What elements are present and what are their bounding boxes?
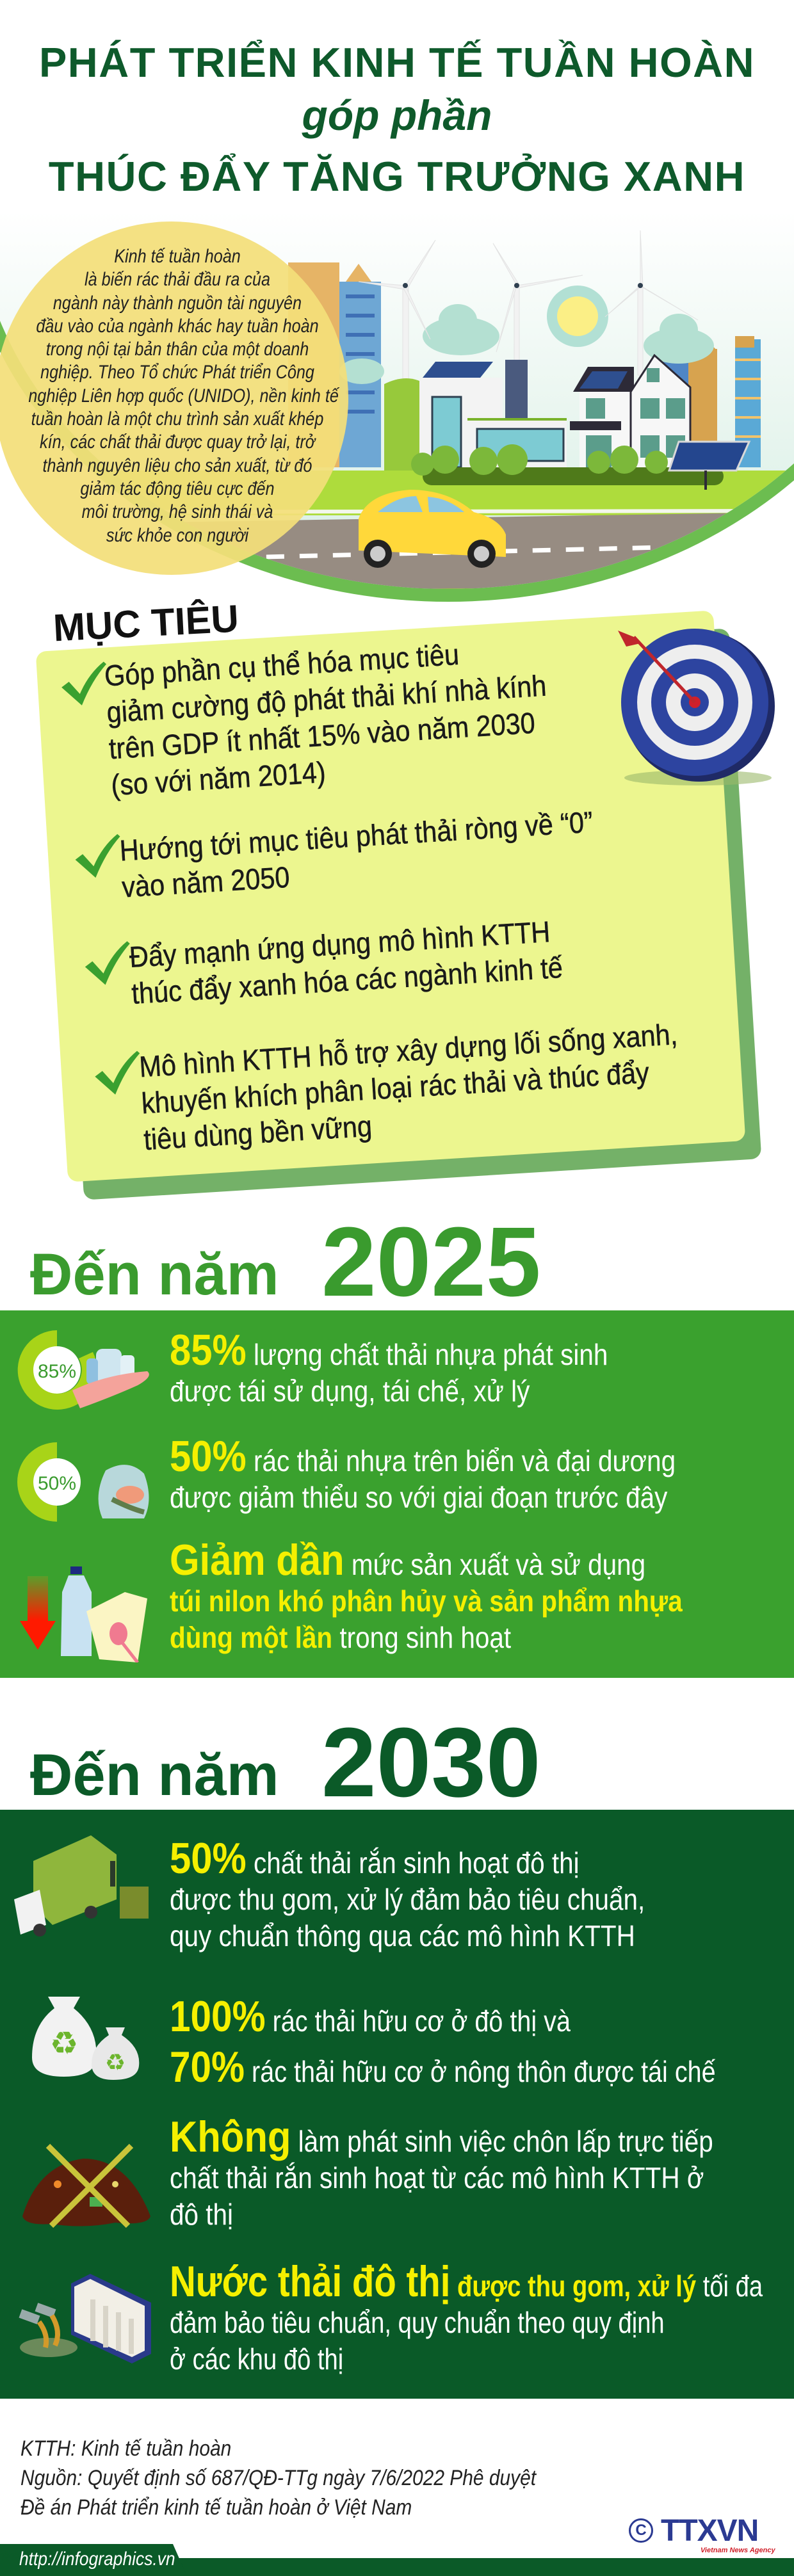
bullet 3: Đẩy mạnh ứng dụng mô hình KTTH xyxy=(128,915,551,974)
text khong: đô thị xyxy=(170,2198,233,2231)
check 1 xyxy=(61,662,106,705)
yellow circle xyxy=(0,221,348,575)
logo: TTXVN xyxy=(629,2514,775,2554)
text 50% xyxy=(170,1432,676,1514)
wind turbines xyxy=(359,230,698,379)
title: PHÁT TRIỂN KINH TẾ TUẦN HOÀN xyxy=(39,39,755,86)
sun xyxy=(547,286,608,347)
bullet 1: giảm cường độ phát thải khí nhà kính xyxy=(106,669,547,729)
url text: http://infographics.vn xyxy=(19,2548,175,2570)
intro text: nghiệp. Theo Tổ chức Phát triển Công xyxy=(40,362,314,383)
panel: 2025 band xyxy=(0,1310,794,1678)
bullet 2: Hướng tới mục tiêu phát thải ròng về “0” xyxy=(118,805,594,867)
bullet 4: Mô hình KTTH hỗ trợ xây dựng lối sống xanh, xyxy=(138,1017,678,1083)
icon: donut 85%: 85% xyxy=(38,1361,76,1382)
icon: reduce plastic xyxy=(20,1566,147,1662)
text 50%: 50% rác thải nhựa trên biển và đại dương xyxy=(170,1432,676,1481)
grass and hedges xyxy=(113,471,786,515)
heading: den nam 2025 xyxy=(30,1207,541,1317)
heading: den nam 2030: 2030 xyxy=(321,1707,541,1817)
text nuoc thai: ở các khu đô thị xyxy=(170,2342,343,2376)
green ring xyxy=(0,0,794,602)
logo: TTXVN: Vietnam News Agency xyxy=(701,2547,775,2554)
text 100% / 70%: 70% rác thải hữu cơ ở nông thôn được tái chế xyxy=(170,2043,716,2091)
check 4 xyxy=(95,1051,140,1095)
heading: den nam 2025: 2025 xyxy=(321,1207,541,1317)
road xyxy=(254,513,727,589)
right buildings xyxy=(660,336,761,467)
text 85%: 85% lượng chất thải nhựa phát sinh xyxy=(170,1326,608,1374)
text giam dan xyxy=(170,1536,683,1654)
icon: water treatment xyxy=(19,2274,151,2363)
house 2 xyxy=(570,355,690,471)
intro text xyxy=(28,246,339,546)
intro text: kín, các chất thải được quay trở lại, trở xyxy=(40,431,315,453)
icon: recycle bags: ♻ xyxy=(105,2049,126,2075)
lower lime xyxy=(433,588,474,589)
text nuoc thai: đảm bảo tiêu chuẩn, quy chuẩn theo quy định xyxy=(170,2306,665,2339)
icon: target xyxy=(618,629,775,785)
heading: den nam 2025: Đến năm xyxy=(30,1242,279,1307)
bullet 3: thúc đẩy xanh hóa các ngành kinh tế xyxy=(131,951,563,1010)
intro text: đầu vào của ngành khác hay tuần hoàn xyxy=(36,316,319,337)
bullet 1 xyxy=(104,638,547,801)
bullet 1: (so với năm 2014) xyxy=(110,755,327,801)
icon: donut 85% xyxy=(18,1330,149,1410)
text 85% xyxy=(170,1326,608,1408)
check 3 xyxy=(85,941,130,985)
bullet 1: Góp phần cụ thể hóa mục tiêu xyxy=(104,638,460,693)
text khong xyxy=(170,2113,713,2231)
intro text: thành nguyên liệu cho sản xuất, từ đó xyxy=(43,455,312,476)
text giam dan: túi nilon khó phân hủy và sản phẩm nhựa xyxy=(170,1584,683,1618)
text nuoc thai: Nước thải đô thị được thu gom, xử lý tối đa xyxy=(170,2257,763,2306)
intro text: ngành này thành nguồn tài nguyên xyxy=(53,293,302,314)
title: THÚC ĐẨY TĂNG TRƯỞNG XANH xyxy=(49,153,745,200)
intro text: giảm tác động tiêu cực đến xyxy=(80,478,275,499)
text giam dan: Giảm dần mức sản xuất và sử dụng xyxy=(170,1536,645,1584)
text 100% / 70% xyxy=(170,1992,716,2091)
intro text: nghiệp Liên hợp quốc (UNIDO), nền kinh tế xyxy=(28,385,339,407)
intro text: là biến rác thải đầu ra của xyxy=(85,269,270,290)
intro text: sức khỏe con người xyxy=(106,525,248,546)
check 2 xyxy=(76,833,120,878)
bottom bar xyxy=(0,2544,794,2576)
icon: no landfill xyxy=(22,2143,150,2228)
text 50% 2030: 50% chất thải rắn sinh hoạt đô thị xyxy=(170,1834,579,1883)
clouds xyxy=(339,304,714,384)
bullet 4 xyxy=(138,1017,678,1156)
bullet 4: tiêu dùng bền vững xyxy=(143,1109,373,1156)
panel: muc tieu xyxy=(36,610,745,1182)
title: góp phần xyxy=(302,92,492,139)
title xyxy=(39,39,755,200)
heading: den nam 2030 xyxy=(30,1707,541,1817)
bullet 3 xyxy=(128,915,563,1010)
car xyxy=(359,490,506,568)
solar panel xyxy=(669,442,749,490)
bullet 1: trên GDP ít nhất 15% vào năm 2030 xyxy=(108,706,536,765)
text khong: chất thải rắn sinh hoạt từ các mô hình KTTH ở xyxy=(170,2161,704,2194)
footer notes: Nguồn: Quyết định số 687/QĐ-TTg ngày 7/6/2022 Phê duyệt xyxy=(20,2466,536,2490)
footer notes: Đề án Phát triển kinh tế tuần hoàn ở Việt Nam xyxy=(20,2495,412,2520)
heading: muc tieu: MỤC TIÊU xyxy=(52,597,240,650)
bullet 4: khuyến khích phân loại rác thải và thúc đẩy xyxy=(140,1056,650,1120)
bullet 2 xyxy=(118,805,594,904)
footer notes: KTTH: Kinh tế tuần hoàn xyxy=(20,2436,231,2461)
text giam dan: dùng một lần trong sinh hoạt xyxy=(170,1621,511,1654)
icon: donut 50% xyxy=(17,1442,149,1522)
text 50% 2030: được thu gom, xử lý đảm bảo tiêu chuẩn, xyxy=(170,1883,645,1916)
logo: TTXVN: C xyxy=(635,2522,647,2539)
panel shadow xyxy=(52,628,761,1200)
lime hill xyxy=(384,378,419,471)
panel: 2030 band xyxy=(0,1810,794,2399)
intro text: trong nội tại bản thân của một doanh xyxy=(46,339,309,360)
intro text: môi trường, hệ sinh thái và xyxy=(82,501,273,522)
footer notes xyxy=(20,2436,537,2520)
hero illustration xyxy=(0,221,794,602)
intro text: tuần hoàn là một chu trình sản xuất khép xyxy=(31,408,323,430)
icon: recycle bags: ♻ xyxy=(50,2025,78,2061)
icon: donut 50%: 50% xyxy=(38,1473,76,1494)
left buildings xyxy=(288,262,381,467)
text 85%: được tái sử dụng, tái chế, xử lý xyxy=(170,1374,530,1408)
text khong: Không làm phát sinh việc chôn lấp trực tiếp xyxy=(170,2113,713,2161)
bullet 2: vào năm 2050 xyxy=(121,860,291,904)
text 100% / 70%: 100% rác thải hữu cơ ở đô thị và xyxy=(170,1992,571,2041)
icon: garbage truck xyxy=(14,1835,149,1936)
text 50% 2030 xyxy=(170,1834,645,1952)
text 50%: được giảm thiểu so với giai đoạn trước đây xyxy=(170,1481,667,1514)
heading: den nam 2030: Đến năm xyxy=(30,1743,279,1808)
logo: TTXVN: TTXVN xyxy=(661,2514,758,2548)
house 1 xyxy=(419,360,567,474)
text 50% 2030: quy chuẩn thông qua các mô hình KTTH xyxy=(170,1919,635,1952)
text nuoc thai xyxy=(170,2257,763,2376)
intro text: Kinh tế tuần hoàn xyxy=(114,246,241,267)
icon: recycle bags xyxy=(32,1997,140,2080)
